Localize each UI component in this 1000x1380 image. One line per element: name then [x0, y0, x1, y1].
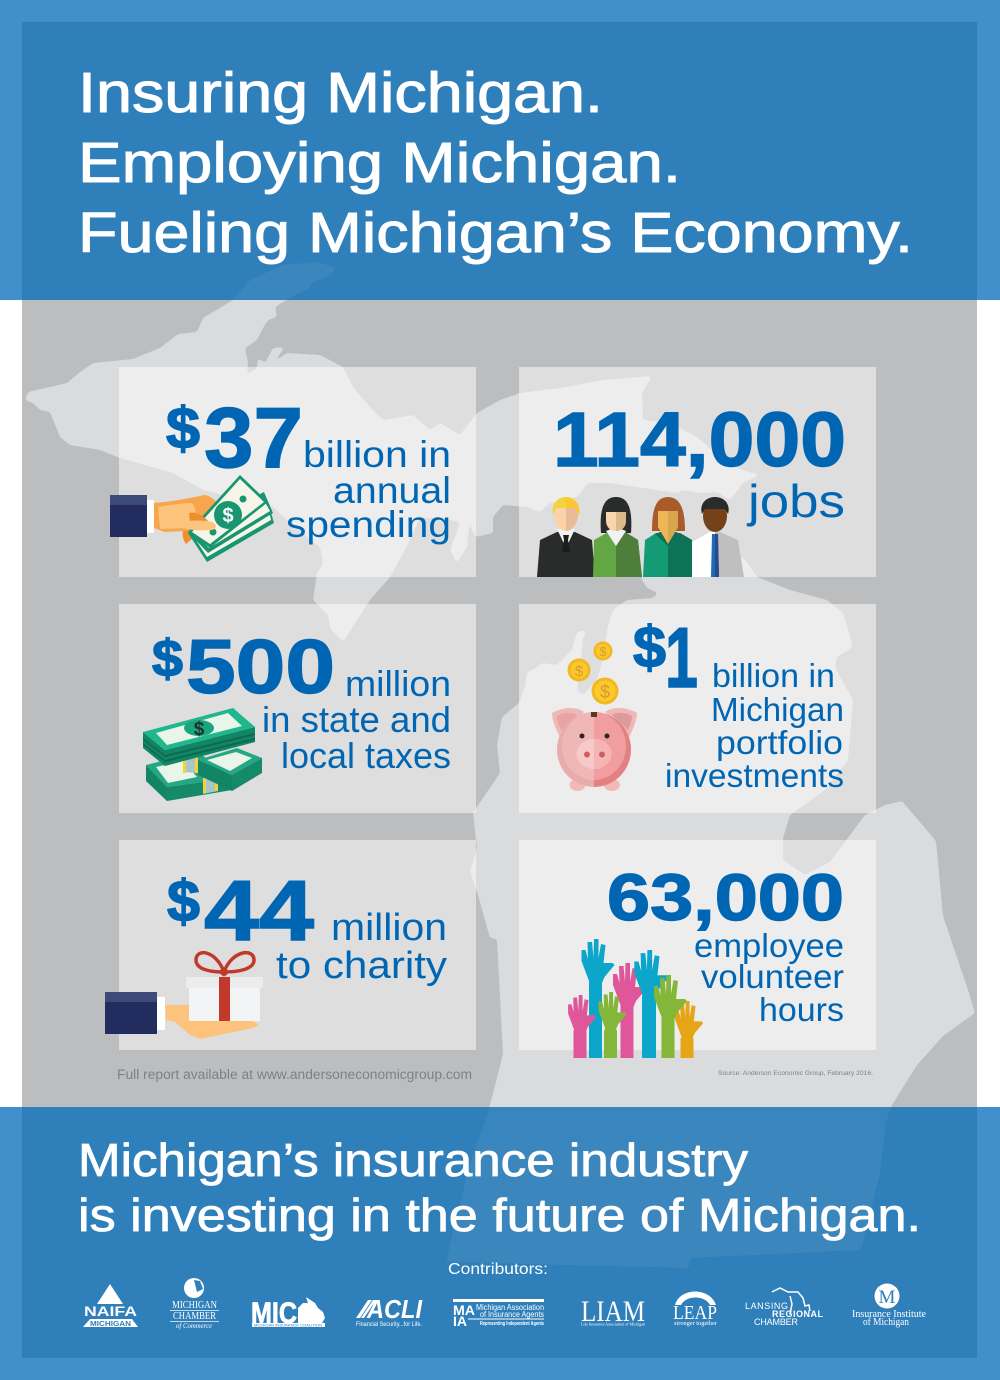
caption: billion in Michigan portfolio investments: [665, 657, 844, 794]
caption: billion in Michigan portfolio investments: investments: [665, 757, 844, 794]
logo: Michigan Chamber of Commerce: CHAMBER: [173, 1311, 216, 1322]
logo: LIAM: Life Insurance Association of Michigan: [581, 1322, 646, 1326]
title: Employing Michigan.: [78, 131, 681, 195]
logo: Insurance Institute of Michigan: [852, 1284, 926, 1328]
logo: Lansing Regional Chamber: LANSING: [745, 1301, 788, 1311]
footer heading: [78, 1134, 921, 1241]
footer heading: is investing in the future of Michigan.: [78, 1189, 921, 1241]
map of Michigan: [25, 262, 975, 1268]
panel: jobs: [519, 367, 876, 577]
figure: $44: 44: [204, 864, 314, 959]
caption: billion in annual spending: billion in: [303, 434, 451, 475]
figure: $1: [633, 611, 698, 706]
figure: $44: [167, 864, 314, 959]
map showing through bands: [233, 262, 891, 1268]
logo: Michigan Association of Insurance Agents: of Insurance Agents: [480, 1310, 544, 1319]
icon: hand holding money: $: [222, 505, 234, 527]
icon: raised hands: [568, 939, 703, 1058]
caption: million in state and local taxes: million: [345, 663, 451, 704]
logo: Michigan Association of Insurance Agents: IA: [453, 1313, 467, 1329]
caption: million to charity: million: [331, 907, 447, 949]
figure: $500: 500: [186, 625, 335, 710]
logo: ACLI: ACLI: [366, 1294, 423, 1324]
title: [78, 61, 913, 265]
logo: Michigan Association of Insurance Agents: Representing Independent Agents: [480, 1321, 544, 1327]
title: Fueling Michigan’s Economy.: [78, 201, 913, 265]
icon: piggy bank with coins: [552, 642, 637, 791]
panel: investments: [519, 604, 876, 813]
figure: $37: [166, 391, 303, 486]
logo: Michigan Association of Insurance Agents: MA: [453, 1302, 475, 1318]
logo: Insurance Institute of Michigan: Insurance Institute: [852, 1309, 926, 1320]
icon: piggy bank with coins: $: [599, 644, 607, 659]
caption: million in state and local taxes: [262, 663, 451, 776]
panel: charity: [105, 840, 476, 1050]
caption: employee volunteer hours: volunteer: [701, 958, 844, 995]
icon: four workers: [537, 497, 744, 577]
caption: billion in annual spending: [286, 434, 451, 545]
figure: 114,000: 114,000: [553, 397, 846, 483]
logo: Lansing Regional Chamber: REGIONAL: [772, 1309, 824, 1319]
title: Insuring Michigan.: [78, 61, 603, 125]
figure: $1: $: [633, 615, 666, 680]
header band: [0, 0, 1000, 300]
logo: LEAP: LEAP: [673, 1302, 717, 1324]
note: source: Source: Anderson Economic Group, February 2016.: [718, 1070, 873, 1077]
logo: ACLI: [356, 1294, 423, 1328]
background panel: [22, 300, 977, 1107]
logo: Michigan Chamber of Commerce: of Commerce: [176, 1322, 212, 1330]
caption: million in state and local taxes: in state and: [262, 699, 451, 740]
figure: $1: 1: [665, 611, 698, 706]
logo: Michigan Chamber of Commerce: [170, 1278, 219, 1330]
figure: $37: $: [166, 396, 200, 461]
logo: NAIFA Michigan: NAIFA: [84, 1304, 137, 1319]
logo: Insurance Institute of Michigan: of Michigan: [863, 1317, 910, 1328]
caption: employee volunteer hours: hours: [759, 991, 844, 1028]
icon: hand with gift: [105, 953, 263, 1039]
logo: MIC: MICHIGAN INSURANCE COALITION: [254, 1324, 323, 1328]
logo: NAIFA Michigan: [83, 1284, 138, 1328]
caption: billion in annual spending: spending: [286, 504, 451, 545]
caption: billion in annual spending: annual: [333, 470, 451, 511]
icon: stacks of cash: $: [194, 719, 205, 740]
footer heading: Michigan’s insurance industry: [78, 1134, 748, 1186]
icon: stacks of cash: [143, 708, 262, 801]
icon: piggy bank with coins: $: [600, 682, 610, 702]
caption: billion in Michigan portfolio investments: billion in: [712, 657, 835, 694]
logo: LEAP: stronger together: [674, 1321, 717, 1327]
icon: piggy bank with coins: $: [575, 663, 584, 680]
icon: hand holding money: [110, 475, 274, 562]
logo: Michigan Chamber of Commerce: MICHIGAN: [172, 1300, 217, 1311]
logo: Lansing Regional Chamber: [745, 1288, 824, 1327]
footer band: [0, 1107, 1000, 1380]
logo: LIAM: LIAM: [581, 1295, 645, 1328]
logo: Insurance Institute of Michigan: M: [879, 1287, 896, 1308]
logo: ACLI: Financial Security...for Life.: [356, 1322, 422, 1328]
caption: jobs: jobs: [746, 475, 845, 527]
logo: Michigan Association of Insurance Agents: [453, 1299, 544, 1329]
caption: billion in Michigan portfolio investments: Michigan: [711, 691, 844, 728]
logo: NAIFA Michigan: MICHIGAN: [90, 1321, 131, 1328]
caption: employee volunteer hours: employee: [694, 927, 844, 964]
caption: million in state and local taxes: local taxes: [281, 735, 451, 776]
caption: billion in Michigan portfolio investments: portfolio: [716, 724, 843, 761]
logo: Michigan Association of Insurance Agents: Michigan Association: [476, 1303, 544, 1312]
panel: volunteer hours: [519, 840, 876, 1058]
figure: $44: $: [167, 869, 200, 934]
logo: LEAP: [673, 1292, 717, 1327]
caption: million to charity: to charity: [276, 945, 447, 987]
figure: $500: [152, 625, 335, 710]
figure: $500: $: [152, 630, 183, 688]
logo: Lansing Regional Chamber: CHAMBER: [754, 1317, 798, 1327]
contributors label: Contributors:: [448, 1261, 548, 1278]
panel: taxes: [119, 604, 476, 813]
logo: MIC: MIC: [251, 1297, 297, 1330]
caption: million to charity: [276, 907, 447, 987]
panel: spending: [110, 367, 476, 577]
figure: $37: 37: [204, 391, 303, 486]
figure: 63,000: 63,000: [607, 860, 844, 934]
caption: employee volunteer hours: [694, 927, 844, 1028]
note: full report: Full report available at www.andersoneconomicgroup.com: [117, 1067, 472, 1082]
